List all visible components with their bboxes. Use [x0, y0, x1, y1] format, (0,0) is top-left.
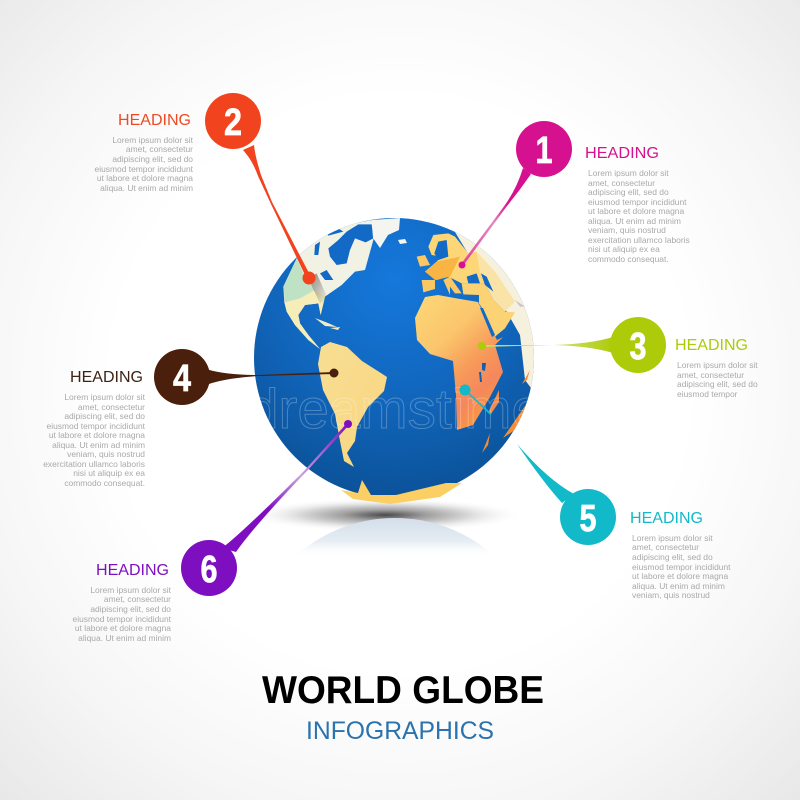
text block 2: aliqua. Ut enim ad minim	[100, 183, 193, 193]
southeast landmasses	[482, 370, 530, 453]
text block 2: Lorem ipsum dolor sit	[112, 135, 194, 145]
text block 4	[43, 369, 146, 488]
text block 1: adipiscing elit, sed do	[588, 187, 669, 197]
text block 1	[585, 145, 690, 264]
text block 1: HEADING	[585, 145, 659, 162]
caribbean islands	[315, 318, 340, 330]
greenland	[372, 218, 400, 248]
text block 1: ut labore et dolore magna	[588, 206, 684, 216]
pin 3	[478, 317, 666, 373]
text block 2: ut labore et dolore magna	[97, 173, 193, 183]
pin 4	[154, 349, 338, 405]
watermark: dreamstime	[247, 377, 543, 440]
text block 5: adipiscing elit, sed do	[632, 552, 713, 562]
pin 2: 2	[224, 102, 242, 144]
text block 1: Lorem ipsum dolor sit	[588, 168, 669, 178]
text block 5: amet, consectetur	[632, 542, 699, 552]
pin 3: 3	[630, 326, 646, 368]
subtitle: INFOGRAPHICS	[306, 717, 494, 745]
text block 6	[72, 562, 172, 643]
text block 3: HEADING	[675, 337, 748, 354]
text block 1: exercitation ullamco laboris	[588, 235, 690, 245]
text block 5: eiusmod tempor incididunt	[632, 562, 731, 572]
text block 1: nisi ut aliquip ex ea	[588, 244, 660, 254]
text block 2: amet, consectetur	[126, 144, 193, 154]
text block 4: amet, consectetur	[78, 402, 145, 412]
pin 5: 5	[580, 498, 596, 540]
madagascar	[488, 390, 499, 414]
globe	[254, 218, 540, 504]
pin 1: 1	[536, 130, 552, 172]
text block 3: Lorem ipsum dolor sit	[677, 360, 758, 370]
text block 6: amet, consectetur	[104, 594, 171, 604]
pin 4: 4	[173, 358, 191, 400]
text block 5: Lorem ipsum dolor sit	[632, 533, 713, 543]
african lakes	[479, 363, 486, 382]
text block 6: eiusmod tempor incididunt	[72, 614, 172, 624]
text block 4: exercitation ullamco laboris	[43, 459, 145, 469]
text block 2	[94, 112, 194, 193]
text block 5: HEADING	[630, 510, 703, 527]
text block 1: aliqua. Ut enim ad minim	[588, 216, 681, 226]
text block 2: adipiscing elit, sed do	[112, 154, 193, 164]
text block 3: adipiscing elit, sed do	[677, 379, 758, 389]
pin 2	[205, 93, 316, 284]
text block 5: ut labore et dolore magna	[632, 571, 728, 581]
pin 6	[181, 420, 352, 596]
text block 6: ut labore et dolore magna	[75, 623, 171, 633]
text block 4: Lorem ipsum dolor sit	[64, 392, 146, 402]
text block 3: eiusmod tempor	[677, 389, 738, 399]
europe and middle east	[417, 233, 525, 337]
text block 1: commodo consequat.	[588, 254, 669, 264]
text block 4: veniam, quis nostrud	[67, 449, 145, 459]
text block 1: veniam, quis nostrud	[588, 225, 666, 235]
asia	[455, 232, 534, 388]
text block 2: eiusmod tempor incididunt	[94, 164, 194, 174]
iceland	[398, 239, 407, 244]
text block 4: commodo consequat.	[64, 478, 145, 488]
text block 3: amet, consectetur	[677, 370, 744, 380]
text block 4: HEADING	[70, 369, 143, 386]
text block 6: adipiscing elit, sed do	[90, 604, 171, 614]
globe shadow	[245, 498, 525, 532]
pin 1	[458, 121, 572, 268]
text block 5	[630, 510, 731, 600]
text block 6: HEADING	[96, 562, 169, 579]
text block 4: nisi ut aliquip ex ea	[73, 468, 145, 478]
africa	[415, 295, 503, 430]
text block 1: amet, consectetur	[588, 178, 655, 188]
text block 2: HEADING	[118, 112, 191, 129]
text block 4: ut labore et dolore magna	[49, 430, 145, 440]
text block 6: aliqua. Ut enim ad minim	[78, 633, 171, 643]
text block 4: adipiscing elit, sed do	[64, 411, 145, 421]
text block 5: veniam, quis nostrud	[632, 590, 710, 600]
title: WORLD GLOBE	[262, 669, 544, 712]
text block 1: eiusmod tempor incididunt	[588, 197, 687, 207]
pin 5	[460, 384, 616, 545]
globe reflection	[294, 518, 496, 557]
text block 5: aliqua. Ut enim ad minim	[632, 581, 725, 591]
text block 4: eiusmod tempor incididunt	[46, 421, 146, 431]
antarctica	[341, 480, 462, 504]
text block 3	[675, 337, 758, 399]
north america	[283, 220, 375, 349]
red sea	[480, 308, 495, 337]
text block 4: aliqua. Ut enim ad minim	[52, 440, 145, 450]
text block 6: Lorem ipsum dolor sit	[90, 585, 172, 595]
south america	[318, 342, 387, 467]
pin 6: 6	[200, 549, 218, 591]
